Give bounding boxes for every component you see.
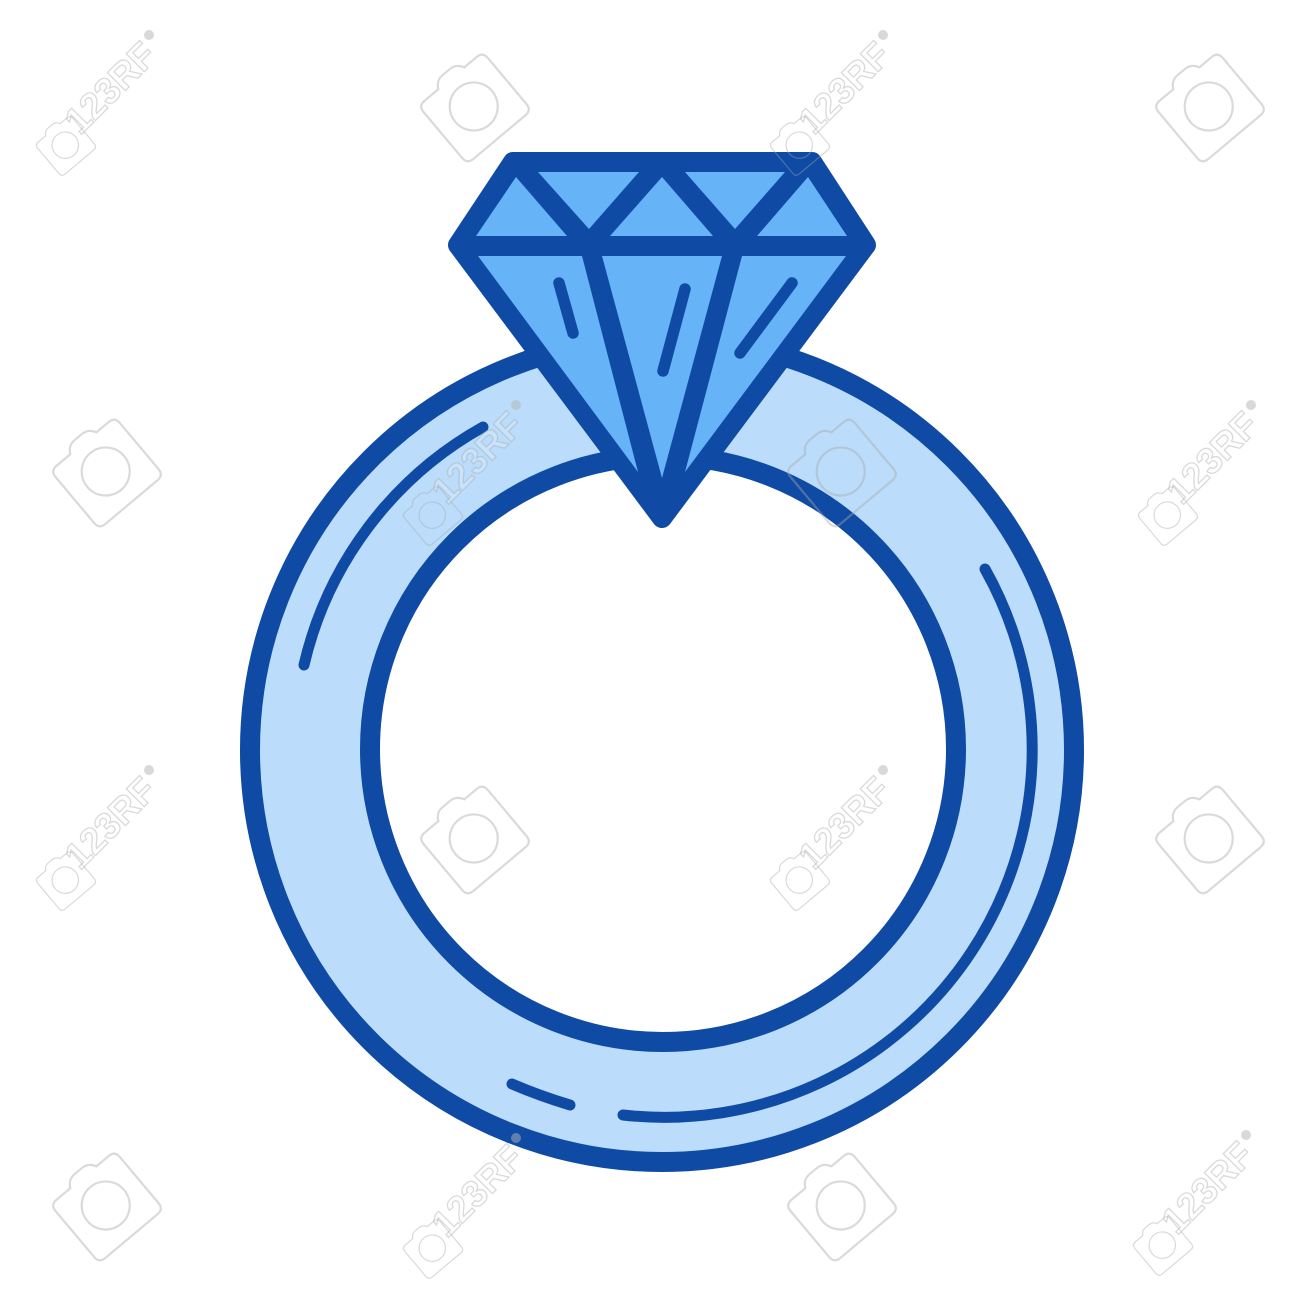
- diamond: [458, 162, 866, 518]
- watermark: row two centre right camera: [780, 411, 899, 529]
- diamond facets: [476, 172, 847, 478]
- ring band: [240, 328, 1084, 1172]
- watermark: row three centre camera: [413, 778, 532, 896]
- watermark: top right camera: [1148, 46, 1267, 164]
- watermark: top centre right: [766, 30, 898, 177]
- watermark: bottom centre right camera: [780, 1145, 899, 1263]
- watermark: row three centre right: 123RF: [791, 769, 898, 877]
- watermark: row three left: 123RF: [57, 769, 164, 877]
- watermark: bottom right: 123RF: [1154, 1134, 1261, 1242]
- watermark: row two right: 123RF: [1159, 404, 1266, 512]
- diamond highlights: [559, 283, 792, 371]
- watermark: row two centre left: [399, 400, 531, 547]
- watermark: row three left: [32, 765, 164, 912]
- watermark: top left: 123RF: [57, 34, 164, 142]
- watermark: row three centre right: [766, 765, 898, 912]
- watermark: row two left camera: [45, 411, 164, 529]
- watermark: bottom centre left: 123RF: [424, 1137, 531, 1245]
- watermark: bottom right: [1129, 1130, 1261, 1277]
- watermark: top left: [32, 30, 164, 177]
- watermark: row two centre left: 123RF: [424, 404, 531, 512]
- watermark: bottom left camera: [45, 1145, 164, 1263]
- ring highlights: [304, 427, 1032, 1117]
- watermark: top centre right: 123RF: [791, 34, 898, 142]
- watermark: bottom centre left: [399, 1133, 531, 1280]
- watermark: row three right camera: [1148, 778, 1267, 896]
- watermark: top centre camera: [413, 46, 532, 164]
- watermark: row two right: [1134, 400, 1266, 547]
